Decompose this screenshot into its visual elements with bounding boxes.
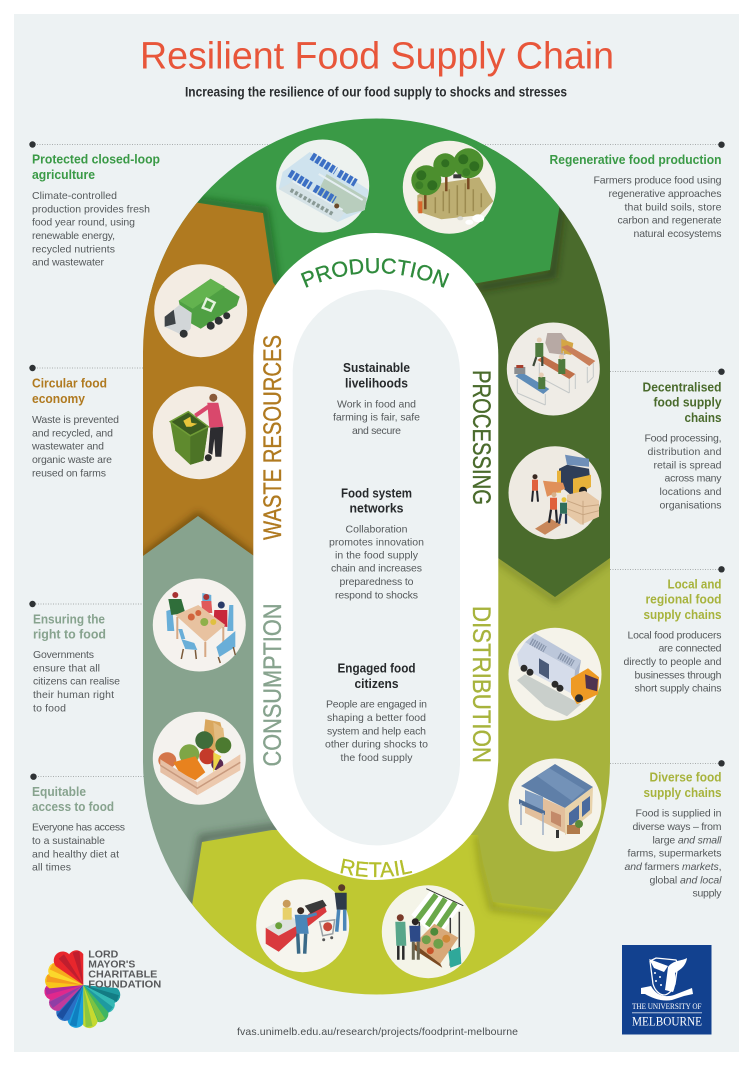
label: retail: RETAIL: [340, 858, 412, 878]
callout: circular food economy: wastewater and: [31, 441, 104, 453]
callout: circular food economy: reused on farms: [32, 467, 106, 479]
callout: local and regional food supply chains: short supply chains: [634, 683, 722, 695]
centre text: sustainable livelihoods: farming is fair, safe: [333, 412, 420, 424]
callout: circular food economy: and recycled, and: [32, 427, 113, 439]
logo: lord mayor's charitable foundation: FOUNDATION: [88, 978, 161, 990]
icon: market stall: [382, 885, 475, 978]
icon: food processing line: [507, 322, 600, 416]
centre text: engaged food citizens: People are engaged in: [326, 699, 427, 711]
logo: lord mayor's charitable foundation: MAYOR'S: [88, 958, 135, 970]
callout: local and regional food supply chains: are connected: [658, 643, 722, 655]
callout: diverse food supply chains: and farmers markets,: [624, 861, 722, 873]
callout: decentralised food supply chains: food supply: [654, 395, 722, 410]
centre text: engaged food citizens: [325, 661, 428, 764]
logo: university of melbourne: THE UNIVERSITY OF: [632, 1001, 702, 1011]
logo: lord mayor's charitable foundation: [43, 948, 161, 1029]
label: waste resources: WASTE RESOURCES: [259, 335, 287, 540]
icon: regenerative farm trees: [403, 141, 496, 234]
callout: regenerative food production: Farmers produce food using: [594, 175, 722, 187]
segment: consumption arrow tip: [143, 516, 254, 575]
inner white track: [253, 233, 498, 880]
callout: equitable access to food: to a sustainable: [32, 835, 105, 847]
segment: retail: [192, 830, 569, 994]
centre text: food system networks: respond to shocks: [335, 589, 418, 601]
callout: equitable access to food: all times: [32, 862, 71, 874]
logo mark: pinwheel: [43, 948, 122, 1029]
callout: equitable access to food: access to food: [32, 799, 114, 814]
callout: local and regional food supply chains: directly to people and: [624, 656, 722, 668]
centre text: food system networks: promotes innovation: [329, 537, 424, 549]
icon: recycling truck: [154, 264, 247, 357]
callout: diverse food supply chains: diverse ways – from: [632, 821, 722, 833]
callout: regenerative food production: [550, 142, 725, 240]
callout: decentralised food supply chains: across many: [664, 473, 722, 485]
callout: decentralised food supply chains: retail is spread: [654, 459, 722, 471]
callout: local and regional food supply chains: Local food producers: [628, 629, 722, 641]
callout: equitable access to food: and healthy diet at: [32, 848, 119, 860]
centre text: sustainable livelihoods: Sustainable: [343, 360, 410, 375]
centre text: engaged food citizens: Engaged food: [338, 661, 416, 676]
callout: protected closed-loop agriculture: renewable energy,: [32, 230, 115, 242]
icon: greenhouses: [276, 140, 369, 232]
icon: supermarket checkout: [256, 879, 349, 972]
centre text: food system networks: Collaboration: [346, 523, 408, 535]
logo: university of melbourne: [622, 945, 712, 1034]
callout: decentralised food supply chains: [642, 368, 725, 511]
callout: decentralised food supply chains: Decentralised: [642, 380, 722, 395]
centre text: food system networks: chain and increases: [331, 563, 422, 575]
callout: diverse food supply chains: supply chains: [644, 785, 722, 800]
callout: local and regional food supply chains: Local and: [668, 576, 722, 591]
centre text: food system networks: networks: [350, 501, 404, 516]
callout: decentralised food supply chains: chains: [684, 410, 722, 425]
icon: warehouse store: [508, 758, 602, 852]
callout: decentralised food supply chains: locations and: [660, 486, 722, 498]
callout: regenerative food production: regenerative approaches: [608, 188, 722, 200]
footer url: fvas.unimelb.edu.au/research/projects/foodprint-melbourne: [237, 1026, 518, 1038]
callout: decentralised food supply chains: distribution and: [648, 446, 722, 458]
centre text: food system networks: Food system: [341, 485, 412, 500]
label: processing: PROCESSING: [467, 370, 495, 505]
callout: local and regional food supply chains: [624, 566, 725, 695]
callout: equitable access to food: Equitable: [32, 784, 86, 799]
callout: regenerative food production: natural ecosystems: [634, 228, 722, 240]
callout: ensuring the right to food: right to food: [33, 627, 106, 642]
centre text: engaged food citizens: citizens: [354, 676, 398, 691]
callout: protected closed-loop agriculture: Climate-controlled: [32, 190, 117, 202]
callout: local and regional food supply chains: businesses through: [634, 669, 722, 681]
callout: protected closed-loop agriculture: and wastewater: [32, 257, 104, 269]
icon: food crate: [153, 712, 246, 805]
callout: diverse food supply chains: Food is supplied in: [636, 808, 722, 820]
segment: processing: [475, 150, 610, 597]
callout: protected closed-loop agriculture: food year round, using: [32, 217, 135, 229]
callout: decentralised food supply chains: organisations: [660, 499, 722, 511]
inner panel: [293, 290, 460, 845]
callout: protected closed-loop agriculture: [29, 141, 160, 269]
callout: local and regional food supply chains: supply chains: [644, 607, 722, 622]
callout: regenerative food production: Regenerative food production: [550, 152, 722, 167]
callout: diverse food supply chains: [624, 760, 725, 900]
callout: local and regional food supply chains: regional food: [646, 592, 722, 607]
subtitle: Increasing the resilience of our food supply to shocks and stresses: [185, 84, 567, 100]
centre text: engaged food citizens: the food supply: [340, 752, 413, 764]
centre text: food system networks: preparedness to: [340, 576, 414, 588]
ring segments: [100, 100, 660, 1010]
callout: ensuring the right to food: Ensuring the: [33, 611, 105, 626]
segment: consumption: [143, 600, 277, 950]
callout: diverse food supply chains: global and local: [650, 874, 722, 886]
centre text: engaged food citizens: shaping a better food: [327, 712, 426, 724]
callout: decentralised food supply chains: Food processing,: [644, 433, 722, 445]
callout: protected closed-loop agriculture: production provides fresh: [32, 203, 150, 215]
centre text: food system networks: [329, 485, 424, 601]
label: production: PRODUCTION: [300, 258, 450, 288]
centre text: sustainable livelihoods: Work in food and: [337, 398, 416, 410]
segment: production: [149, 118, 560, 300]
segment: waste resources: [143, 202, 276, 556]
centre text: engaged food citizens: system and help each: [327, 725, 426, 737]
logo: lord mayor's charitable foundation: LORD: [88, 948, 119, 960]
label: distribution: DISTRIBUTION: [467, 606, 495, 763]
logo: university of melbourne: MELBOURNE: [632, 1014, 702, 1028]
icon: shared meal table: [153, 578, 246, 672]
callout: diverse food supply chains: farms, supermarkets: [628, 848, 722, 860]
callout: ensuring the right to food: ensure that all: [33, 662, 100, 674]
callout: equitable access to food: Everyone has access: [32, 822, 125, 834]
callout: ensuring the right to food: their human right: [33, 689, 114, 701]
callout: diverse food supply chains: large and small: [652, 834, 722, 846]
callout: protected closed-loop agriculture: Protected closed-loop: [32, 152, 160, 166]
callout: equitable access to food: [30, 774, 125, 874]
callout: diverse food supply chains: supply: [692, 888, 722, 900]
logo: lord mayor's charitable foundation: CHARITABLE: [88, 968, 157, 980]
callout: circular food economy: organic waste are: [32, 454, 112, 466]
callout: diverse food supply chains: Diverse food: [650, 770, 722, 785]
callout: protected closed-loop agriculture: recycled nutrients: [32, 243, 115, 255]
title: Resilient Food Supply Chain: [140, 36, 614, 78]
callout: ensuring the right to food: [29, 601, 120, 714]
callout: ensuring the right to food: citizens can realise: [33, 676, 120, 688]
icon: delivery truck: [508, 628, 602, 721]
centre text: engaged food citizens: other during shocks to: [325, 739, 428, 751]
callout: circular food economy: [29, 365, 119, 479]
callout: ensuring the right to food: to food: [33, 702, 66, 714]
supply chain ring: [100, 100, 660, 1010]
callout: protected closed-loop agriculture: agriculture: [32, 167, 95, 182]
callout: circular food economy: Waste is prevented: [32, 414, 119, 426]
callout: circular food economy: Circular food: [32, 376, 107, 391]
centre text: sustainable livelihoods: [333, 360, 420, 437]
callout: regenerative food production: that build soils, store: [624, 201, 722, 213]
label: consumption: CONSUMPTION: [259, 604, 287, 766]
callout: circular food economy: economy: [32, 391, 86, 406]
icon: compost bin and person: [153, 386, 246, 479]
centre text: food system networks: in the food supply: [335, 549, 419, 561]
centre text: sustainable livelihoods: and secure: [352, 425, 401, 437]
crest: [641, 958, 693, 1001]
segment: distribution: [470, 558, 610, 910]
icon: forklift and workers: [508, 446, 602, 539]
centre text: sustainable livelihoods: livelihoods: [345, 376, 408, 391]
callout: regenerative food production: carbon and regenerate: [618, 215, 722, 227]
callout: ensuring the right to food: Governments: [33, 649, 94, 661]
